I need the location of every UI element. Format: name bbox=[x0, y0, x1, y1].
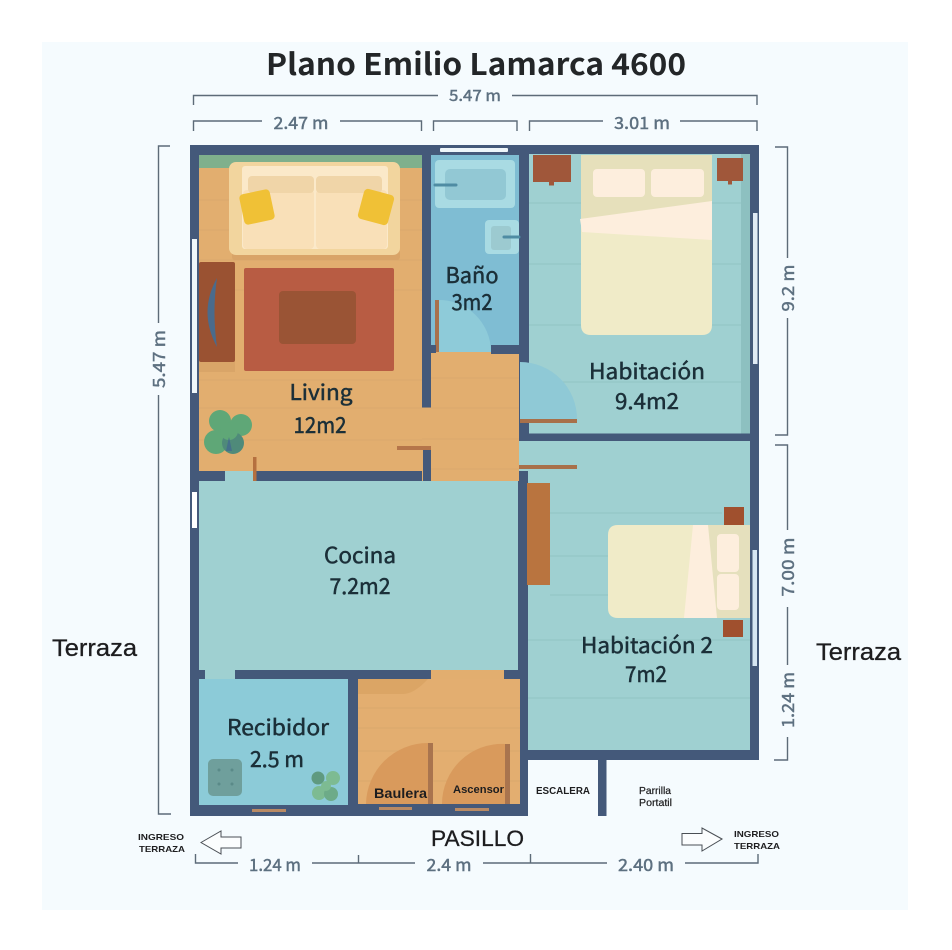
label: recibidor: Recibidor bbox=[227, 711, 330, 742]
label: living: Living bbox=[290, 376, 352, 407]
dimensions: left: 5.47 m bbox=[145, 330, 170, 388]
bathtub bbox=[435, 160, 515, 208]
plant bbox=[204, 410, 252, 454]
door swing: bedroom 1 bbox=[520, 362, 577, 419]
room: entry hall bbox=[199, 679, 348, 805]
bed 2 bbox=[608, 525, 750, 618]
door: ascensor bbox=[442, 744, 510, 804]
label: recibidor: 2.5 m bbox=[250, 743, 304, 774]
room: kitchen bbox=[199, 471, 518, 679]
dimensions: bottom bbox=[196, 851, 758, 876]
dimensions: top: 2.47 m bbox=[274, 109, 328, 134]
bedside tables bbox=[723, 507, 744, 637]
dimensions: top: 3.01 m bbox=[614, 109, 670, 134]
label: baño bbox=[446, 259, 498, 317]
room: storage and lift bbox=[358, 679, 520, 804]
label: habitación 2 bbox=[581, 629, 713, 689]
rug bbox=[244, 268, 394, 371]
label: baño: 3m2 bbox=[452, 286, 492, 317]
dimensions: top bbox=[194, 84, 757, 134]
label: habitación: 9.4m2 bbox=[615, 385, 679, 416]
label: baulera: Baulera bbox=[374, 785, 427, 801]
arrow: right bbox=[682, 828, 722, 851]
door: baulera bbox=[366, 743, 433, 804]
label: habitación 2: 7m2 bbox=[625, 658, 667, 689]
room: living bbox=[199, 155, 431, 471]
dimensions: top: 5.47 m bbox=[449, 84, 501, 106]
dimensions: right: 1.24 m bbox=[774, 672, 799, 728]
label: habitación 2: Habitación 2 bbox=[581, 629, 713, 660]
label: ascensor: Ascensor bbox=[453, 784, 505, 796]
label: pasillo: PASILLO bbox=[431, 826, 524, 851]
arrow: left bbox=[201, 831, 241, 854]
label: ingreso terraza left: TERRAZA bbox=[139, 844, 185, 854]
label: recibidor bbox=[227, 711, 330, 774]
dimensions: bottom: 2.4 m bbox=[426, 851, 472, 876]
sofa bbox=[229, 162, 400, 260]
label: escalera: ESCALERA bbox=[536, 786, 590, 797]
nightstands bbox=[533, 155, 743, 186]
label: cocina bbox=[324, 539, 396, 601]
label: terraza left: Terraza bbox=[52, 635, 138, 662]
label: living: 12m2 bbox=[294, 409, 346, 440]
pouf bbox=[208, 759, 242, 796]
windows and thresholds bbox=[192, 148, 758, 812]
floor plan bbox=[190, 145, 759, 816]
sink bbox=[485, 220, 519, 254]
dimensions: right: 9.2 m bbox=[774, 264, 799, 312]
wardrobe bbox=[527, 483, 550, 585]
label: ingreso terraza left: INGRESO bbox=[138, 832, 184, 842]
label: ingreso terraza right bbox=[734, 829, 780, 851]
room: hall bbox=[422, 408, 519, 481]
dimensions: right bbox=[774, 147, 799, 760]
label: parrilla portatil bbox=[639, 786, 672, 809]
title: Plano Emilio Lamarca 4600 bbox=[266, 40, 686, 84]
room: bedroom 2 bbox=[519, 441, 750, 750]
label: ingreso terraza right: INGRESO bbox=[734, 829, 779, 839]
dimensions: bottom: 1.24 m bbox=[249, 851, 301, 876]
label: cocina: 7.2m2 bbox=[330, 570, 390, 601]
outer walls bbox=[190, 145, 759, 760]
label: living bbox=[290, 376, 352, 440]
room: bathroom bbox=[431, 155, 519, 354]
dimensions: left bbox=[145, 146, 171, 814]
dimensions: right: 7.00 m bbox=[774, 538, 799, 596]
tv unit bbox=[199, 262, 235, 372]
bed bbox=[580, 155, 712, 335]
label: habitación: Habitación bbox=[589, 355, 705, 386]
room: bedroom 1 bbox=[529, 154, 750, 434]
label: cocina: Cocina bbox=[324, 539, 396, 570]
dimensions: bottom: 2.40 m bbox=[618, 851, 674, 876]
label: parrilla portatil: Portatil bbox=[639, 798, 672, 809]
label: ingreso terraza left bbox=[138, 832, 185, 854]
label: ingreso terraza right: TERRAZA bbox=[734, 841, 780, 851]
wall: stair divider bbox=[598, 760, 606, 816]
label: habitación bbox=[589, 355, 705, 416]
plant bbox=[312, 771, 340, 801]
label: terraza right: Terraza bbox=[816, 639, 902, 666]
label: parrilla portatil: Parrilla bbox=[639, 786, 671, 797]
label: baño: Baño bbox=[446, 259, 498, 290]
